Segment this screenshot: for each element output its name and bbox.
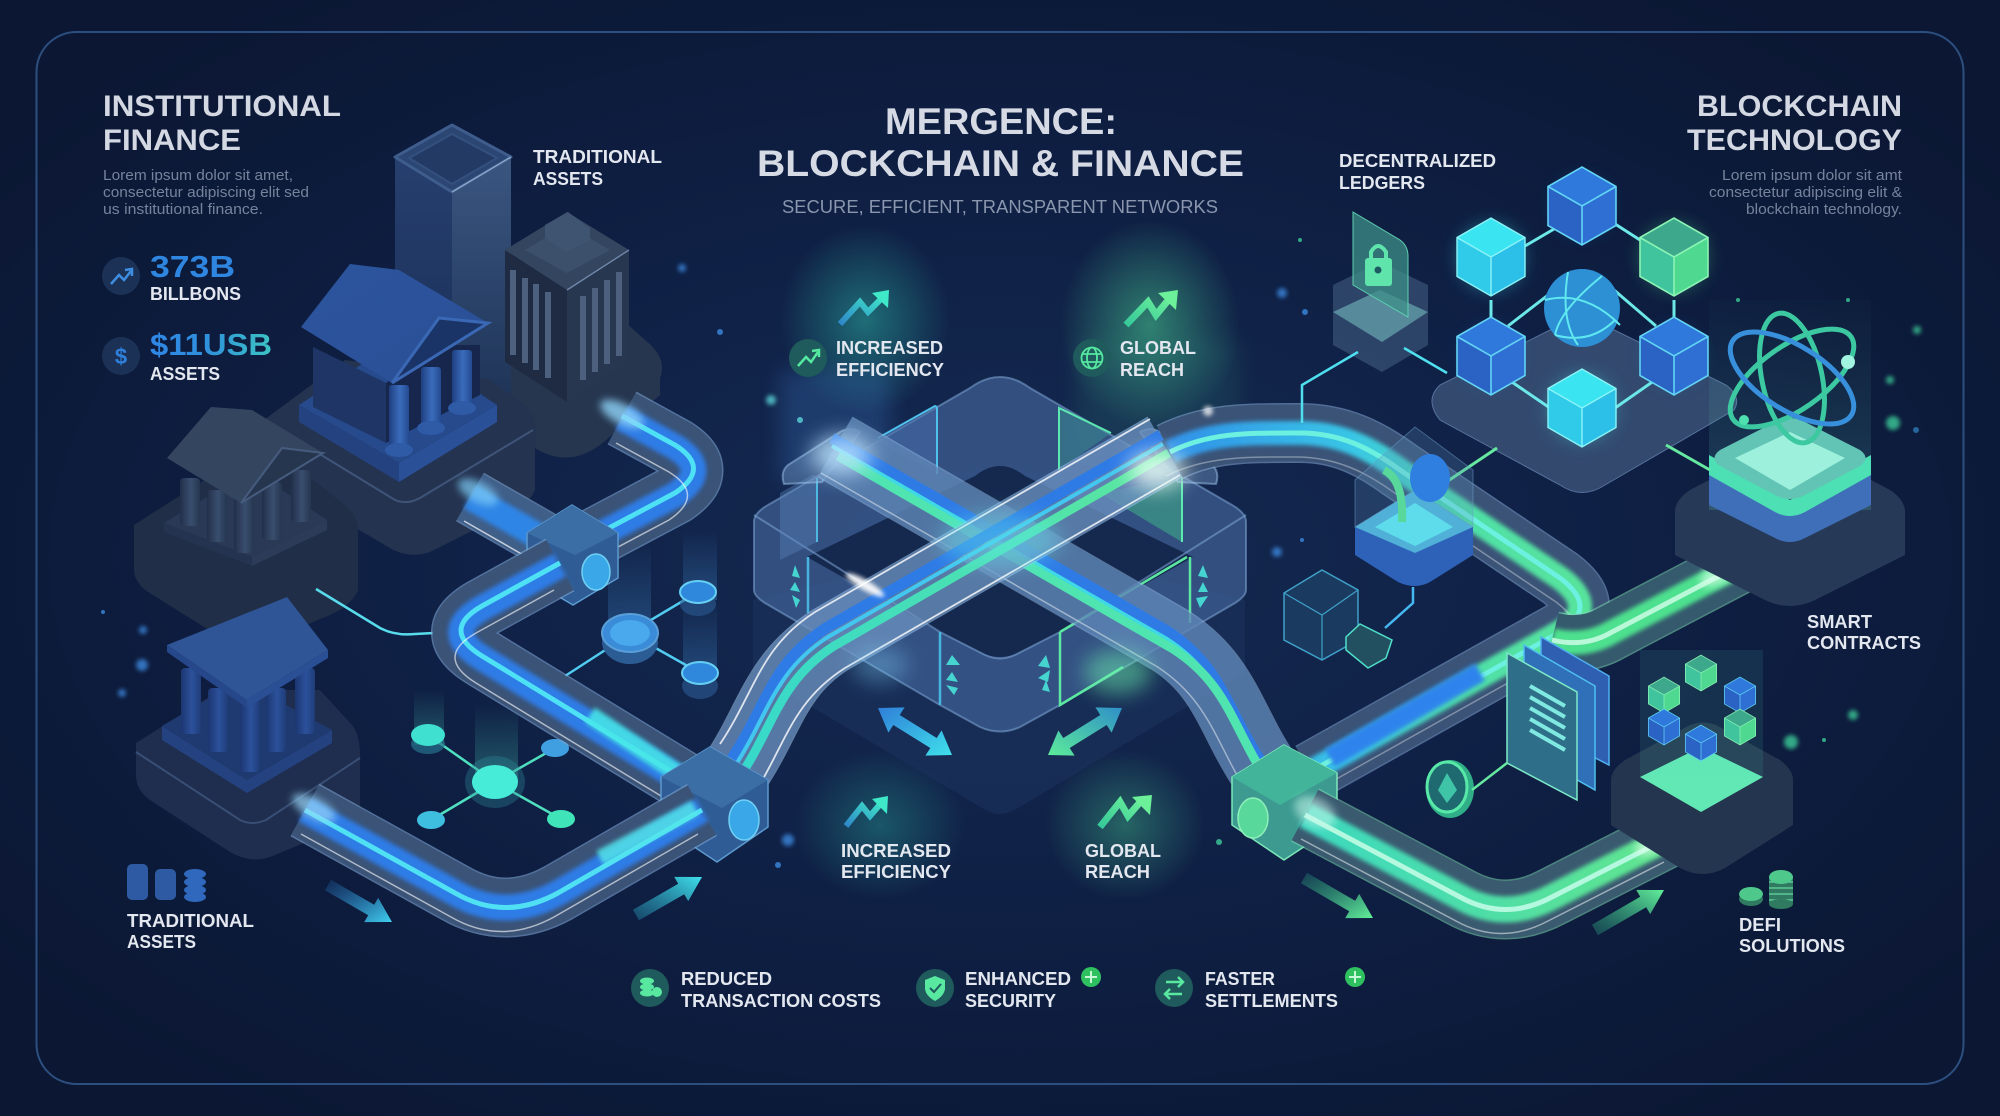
tall glass tower	[395, 125, 511, 400]
left description: Lorem ipsum dolor sit amet,	[103, 167, 293, 184]
cube lower left	[1457, 317, 1525, 395]
benefit: enhanced security	[916, 967, 1101, 1011]
pipe: bottom right	[1289, 789, 1679, 934]
lock pad	[1333, 290, 1428, 342]
teal network links	[428, 735, 561, 820]
doc front panel	[1507, 653, 1577, 800]
trend top teal	[840, 296, 884, 324]
trend arrow icons	[840, 290, 1178, 827]
hub rear-right fin	[1100, 477, 1182, 542]
blue contract run	[1330, 672, 1480, 758]
double arrow green	[1048, 707, 1122, 756]
central glass hub	[754, 377, 1246, 732]
icon: asset cylinders	[127, 864, 206, 902]
defi glow plate	[1640, 747, 1763, 812]
label: global reach top: GLOBAL	[1120, 338, 1196, 358]
beams	[414, 530, 717, 780]
atom platform stack	[1709, 418, 1871, 542]
junction cube right	[1232, 745, 1337, 860]
pipe: crossing A-B	[720, 419, 1268, 800]
hex platform	[1432, 320, 1737, 492]
label: increased efficiency lower: EFFICIENCY	[841, 862, 951, 882]
cube top	[1548, 167, 1616, 245]
pipe: left lower loop	[455, 563, 690, 810]
stat icon dollar: $	[115, 344, 127, 369]
pipe: left stub	[454, 473, 545, 564]
blue disk	[1410, 454, 1450, 502]
green hook	[1384, 470, 1402, 522]
hub blue panel	[874, 408, 937, 473]
atom electrons	[1739, 355, 1855, 425]
platform under tower	[440, 270, 662, 458]
hub green panel	[1059, 408, 1111, 470]
atom orbits	[1715, 307, 1869, 449]
defi glass	[1640, 650, 1763, 777]
blue bank	[299, 264, 497, 482]
benefit: faster settlements	[1155, 967, 1365, 1011]
label: decentralized ledgers: DECENTRALIZED	[1339, 151, 1496, 171]
benefit: faster settlements: SETTLEMENTS	[1205, 991, 1338, 1011]
hub inner opening	[807, 466, 1193, 657]
hub blue panel edge	[878, 406, 937, 474]
icon: transfer badge	[1155, 969, 1193, 1007]
panel: institutional buildings	[134, 125, 662, 859]
double arrow blue	[878, 707, 952, 756]
label: decentralized ledgers: LEDGERS	[1339, 173, 1425, 193]
teal network nodes	[411, 724, 575, 829]
label: traditional assets top: TRADITIONAL	[533, 147, 662, 167]
cube lower right	[1640, 317, 1708, 395]
stat: $11USB assets: $11USB	[150, 327, 272, 362]
title: BLOCKCHAIN & FINANCE	[757, 143, 1244, 184]
benefit: enhanced security: ENHANCED	[965, 969, 1071, 989]
icon: shield badge	[916, 969, 954, 1007]
padlock icon	[1365, 246, 1392, 286]
blue bank platform	[263, 360, 536, 555]
hub front panels	[808, 557, 1190, 705]
benefit: enhanced security: SECURITY	[965, 991, 1056, 1011]
left heading	[103, 90, 341, 157]
left description: us institutional finance.	[103, 201, 263, 218]
glass column	[1709, 300, 1871, 510]
doc lines	[1530, 686, 1565, 750]
title: MERGENCE:	[885, 101, 1117, 142]
label: increased efficiency lower: INCREASED	[841, 841, 951, 861]
label: smart contracts: CONTRACTS	[1807, 633, 1921, 653]
junction cube left	[661, 747, 768, 862]
label: smart contracts: SMART	[1807, 612, 1872, 632]
pipe: left upper loop	[584, 394, 694, 565]
left description: consectetur adipiscing elit sed	[103, 184, 309, 201]
label: smart contracts	[1807, 612, 1921, 653]
icon: coins badge	[631, 969, 669, 1007]
right description: blockchain technology.	[1746, 201, 1902, 218]
pipe B end cap	[783, 429, 860, 484]
trend top green head	[1158, 290, 1178, 310]
panel: decentralized ledger lock	[1302, 212, 1447, 423]
right heading: TECHNOLOGY	[1687, 124, 1902, 157]
eth coin	[1426, 760, 1507, 818]
lower blue bank	[162, 597, 332, 793]
lock card	[1353, 212, 1408, 317]
benefit: faster settlements: FASTER	[1205, 969, 1275, 989]
arrow: bottom-right green down	[1301, 873, 1373, 918]
icon: coin stacks	[1739, 870, 1793, 909]
label: global reach top: REACH	[1120, 360, 1184, 380]
icon: globe badge	[1073, 339, 1111, 377]
hub rear-left fin edge	[816, 478, 818, 542]
trend top green	[1126, 298, 1170, 325]
lock junction	[1355, 427, 1473, 586]
icon: plus badge 2	[1345, 967, 1365, 987]
flow arrows	[325, 707, 1664, 935]
left description	[103, 167, 309, 218]
stat: $11USB assets	[102, 327, 272, 384]
cube bottom	[1548, 369, 1616, 447]
label: increased efficiency top	[789, 338, 944, 380]
label: traditional assets top: ASSETS	[533, 169, 603, 189]
stat: 373B billbons	[102, 249, 241, 304]
benefit: reduced transaction costs: TRANSACTION COSTS	[681, 991, 881, 1011]
label: global reach lower: GLOBAL	[1085, 841, 1161, 861]
pipe: bottom left	[288, 788, 702, 932]
crossing light flares	[812, 435, 1185, 694]
stat: 373B billbons: 373B	[150, 249, 235, 284]
panel: blockchain hex network	[1432, 167, 1737, 492]
label: traditional assets lower: TRADITIONAL	[127, 911, 254, 931]
label: increased efficiency top: EFFICIENCY	[836, 360, 944, 380]
label: traditional assets top	[533, 147, 662, 189]
hex link lines	[1491, 213, 1674, 408]
right heading	[1687, 90, 1902, 157]
green connector	[1430, 445, 1710, 493]
label: global reach lower	[1085, 841, 1161, 882]
label: traditional assets lower	[127, 864, 254, 952]
trend lower teal	[846, 802, 882, 826]
label: increased efficiency lower	[841, 841, 951, 882]
left heading: FINANCE	[103, 124, 241, 157]
benefit: reduced transaction costs	[631, 969, 881, 1011]
label: defi solutions: SOLUTIONS	[1739, 936, 1845, 956]
stat icon trend	[102, 257, 140, 295]
hub green panel edge	[1059, 408, 1111, 470]
trend lower green	[1100, 800, 1142, 827]
arrow: bottom-left cyan	[633, 877, 702, 920]
stat icon dollar	[102, 337, 140, 375]
right description	[1709, 167, 1903, 218]
dark bank platform	[134, 470, 358, 646]
big dark base under central hub	[753, 540, 1245, 814]
subtitle: SECURE, EFFICIENT, TRANSPARENT NETWORKS	[782, 197, 1218, 217]
dark bank	[164, 407, 327, 566]
trend top teal head	[872, 290, 889, 308]
label: defi solutions: DEFI	[1739, 915, 1781, 935]
blue bank lower platform	[136, 690, 360, 859]
cyan connector from bank	[316, 589, 453, 634]
pipe A end cap	[1140, 429, 1217, 484]
label: global reach lower: REACH	[1085, 862, 1150, 882]
particles	[101, 238, 1921, 868]
right description: Lorem ipsum dolor sit amt	[1722, 167, 1903, 184]
trend lower teal head	[872, 796, 888, 814]
label: increased efficiency top: INCREASED	[836, 338, 943, 358]
label: global reach top	[1073, 338, 1196, 380]
hub chevrons	[790, 565, 1208, 695]
cube upper right	[1640, 218, 1708, 296]
chip	[1346, 624, 1392, 668]
junction cube upper	[527, 505, 618, 605]
chip line	[1385, 587, 1413, 628]
defi small cubes	[1648, 655, 1756, 761]
hub rear-right fin edge	[1181, 477, 1183, 542]
arrow: bottom-left blue	[325, 880, 392, 922]
cube glow	[1461, 182, 1704, 438]
hub rim edges	[754, 515, 1246, 658]
stat: $11USB assets: ASSETS	[150, 364, 220, 384]
pipe: smart contract feed	[1552, 552, 1748, 643]
atom base	[1675, 444, 1905, 606]
benefit: reduced transaction costs: REDUCED	[681, 969, 772, 989]
smart contract document	[1426, 637, 1609, 818]
hub rear-left fin	[780, 475, 817, 560]
ambient glows	[780, 220, 1240, 900]
pipe: right arc	[1166, 433, 1580, 796]
data cube and chip	[1284, 570, 1413, 668]
lock connector lines	[1302, 348, 1447, 423]
icon: plus badge	[1081, 967, 1101, 987]
left heading: INSTITUTIONAL	[103, 90, 341, 123]
right heading: BLOCKCHAIN	[1697, 90, 1902, 123]
blue network links	[562, 592, 700, 705]
title	[757, 101, 1244, 184]
label: decentralized ledgers	[1339, 151, 1496, 193]
panel: defi platform	[1611, 650, 1793, 874]
blue network nodes	[602, 581, 718, 699]
globe	[1544, 269, 1620, 347]
trend lower green head	[1132, 795, 1152, 815]
icon: trend badge	[789, 339, 827, 377]
left network nodes	[316, 530, 718, 829]
cube upper left	[1457, 218, 1525, 296]
stat: 373B billbons: BILLBONS	[150, 284, 241, 304]
label: defi solutions	[1739, 870, 1845, 956]
panel: atom smart contract platform	[1430, 300, 1905, 606]
dark office tower	[505, 212, 629, 402]
right description: consectetur adipiscing elit &	[1709, 184, 1902, 201]
arrow: bottom-right green up	[1592, 890, 1664, 935]
label: traditional assets lower: ASSETS	[127, 932, 196, 952]
